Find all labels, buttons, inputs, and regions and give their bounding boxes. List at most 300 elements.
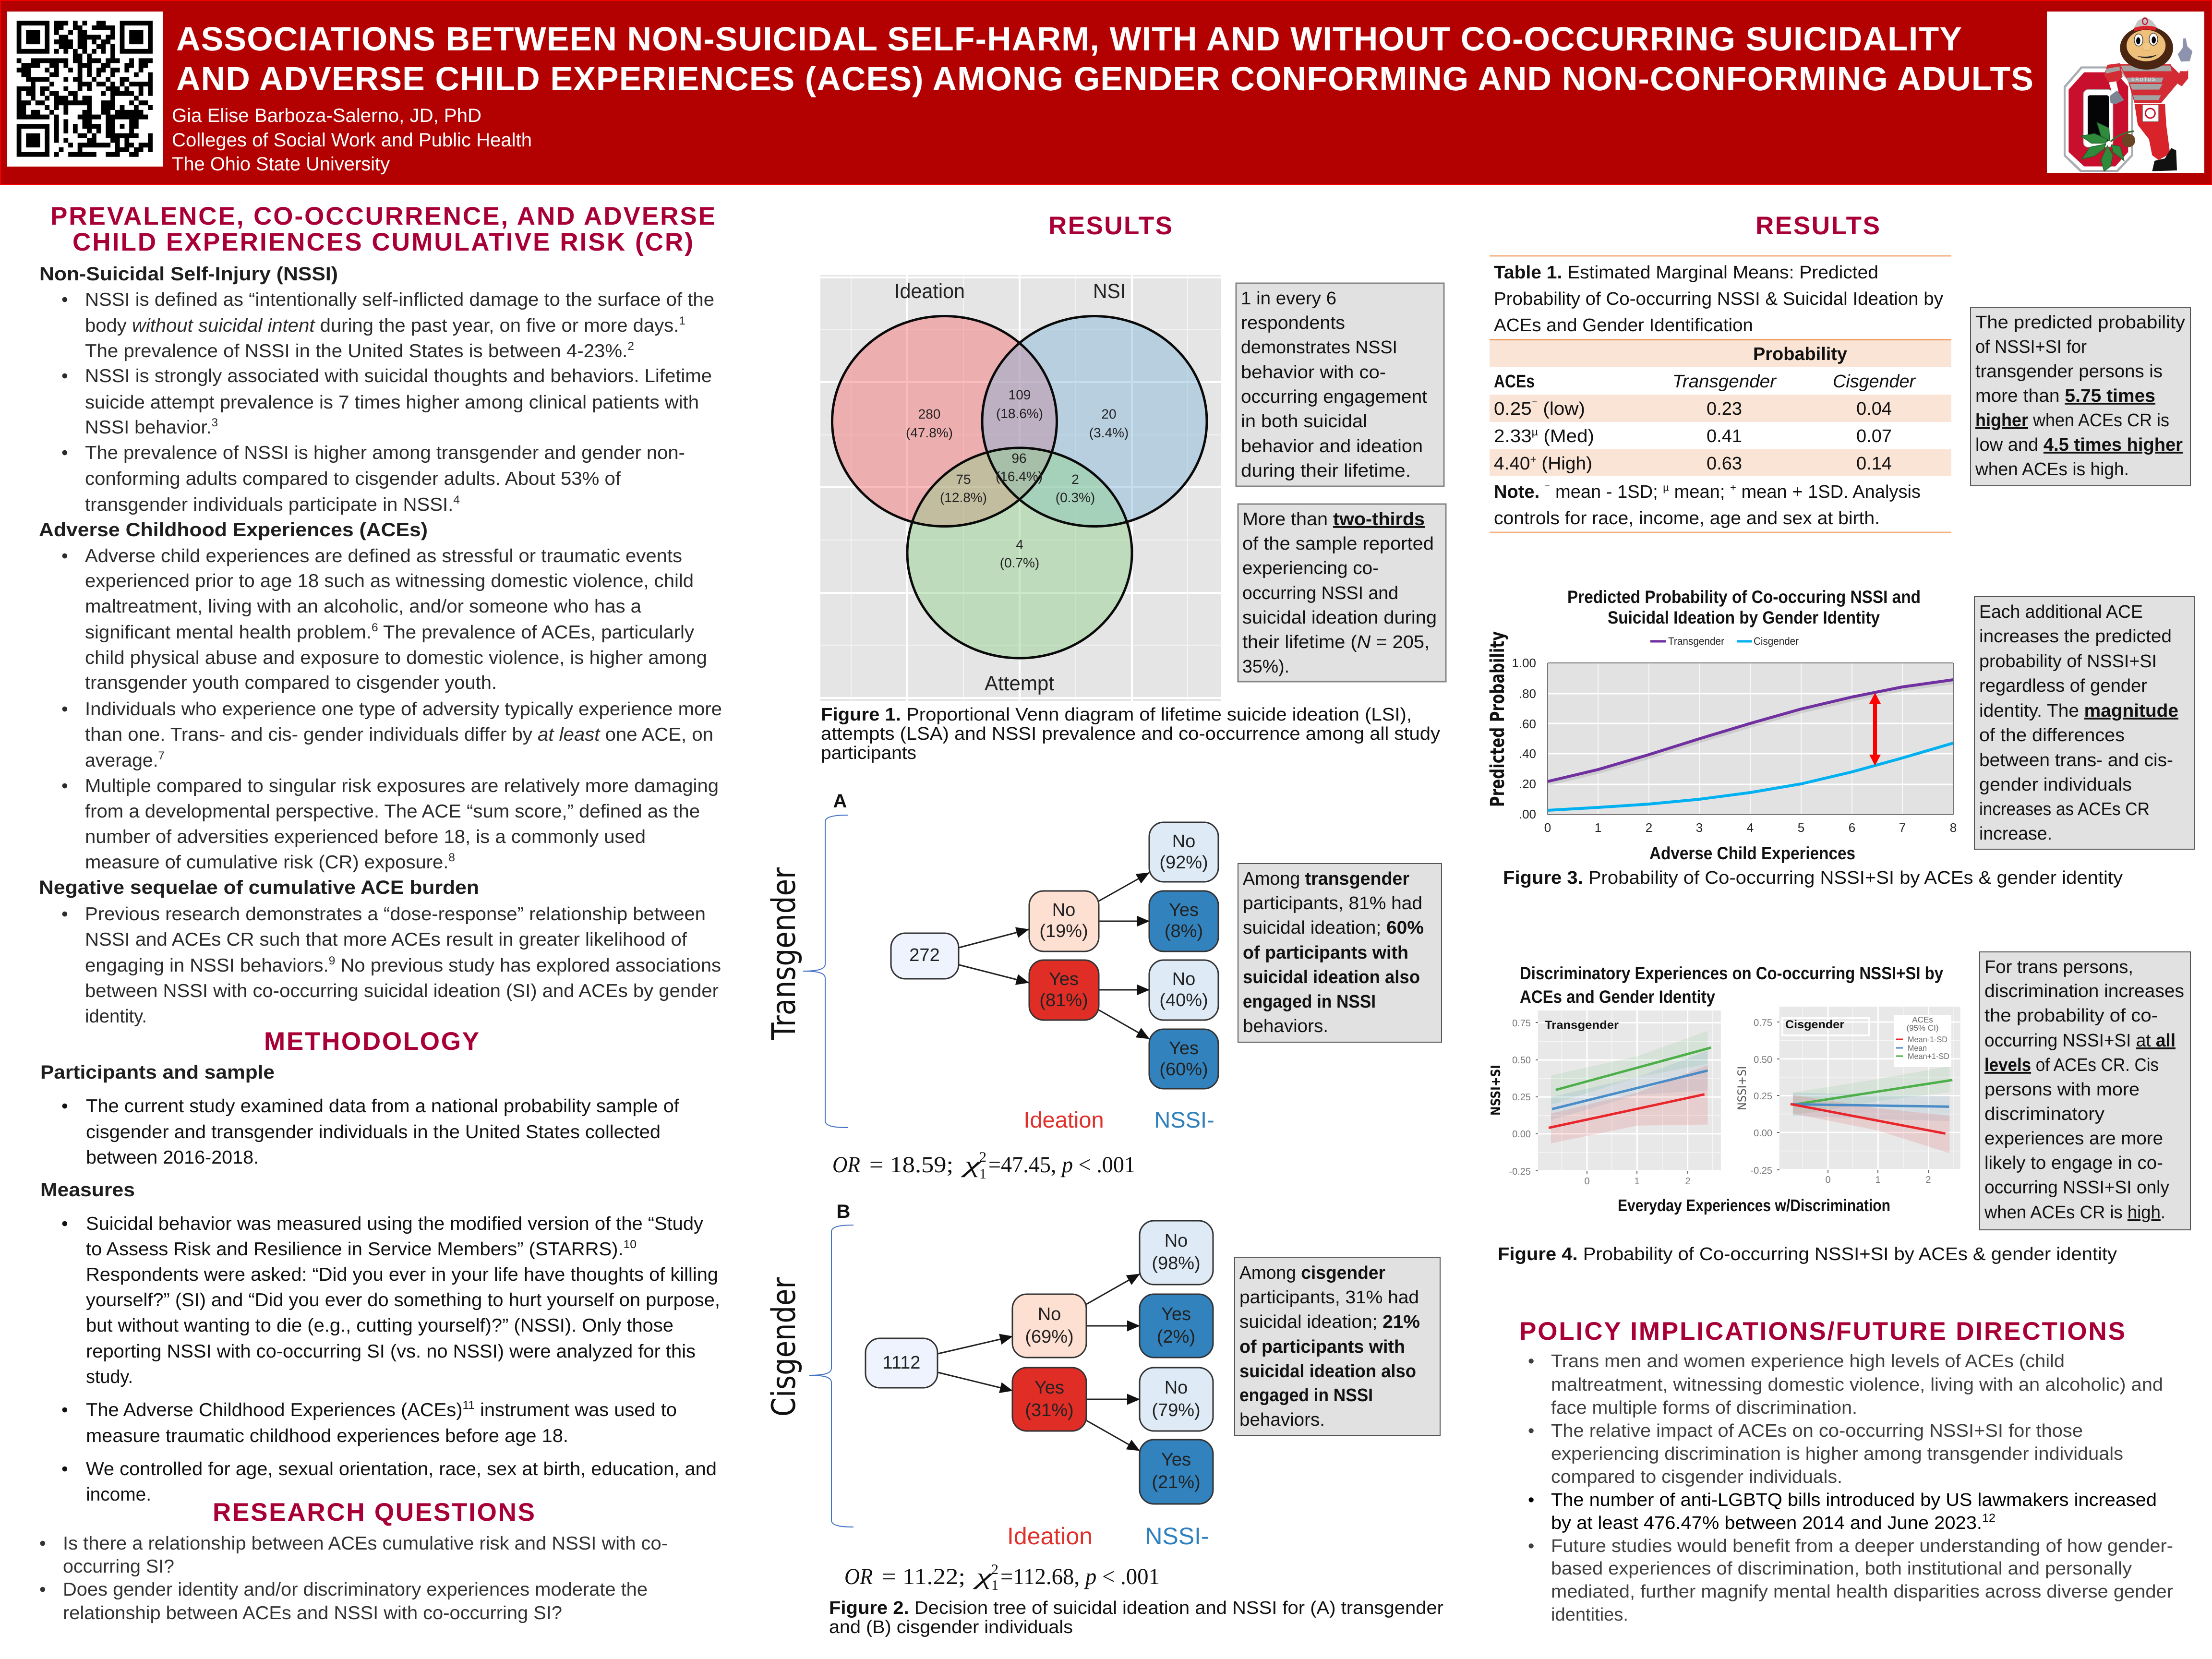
callout: trans persons discrimination: occurring NSSI+SI only	[1984, 1178, 2169, 1198]
legend	[1894, 1015, 1951, 1067]
chart: figure 3 predicted probability line chart: .40	[1519, 746, 1536, 761]
plot: transgender: -0.25	[1509, 1166, 1531, 1177]
callout: cisgender tree: engaged in NSSI	[1239, 1385, 1373, 1406]
statistic: cisgender odds ratio: 2	[991, 1562, 998, 1577]
callout: cisgender tree: of participants with	[1239, 1337, 1405, 1357]
callout: cisgender tree	[1235, 1257, 1440, 1435]
text block: questions: Does gender identity and/or discriminatory experiences moderate the	[63, 1579, 648, 1600]
text block: policy bullets: Trans men and women experience high levels of ACEs (child	[1551, 1351, 2065, 1371]
chart: decision tree A transgender: No	[1172, 969, 1195, 989]
plot: cisgender: 0.50	[1754, 1055, 1772, 1065]
table: estimated marginal means: µ	[1532, 426, 1539, 438]
icon: university mascot logo	[2047, 12, 2204, 173]
text block: questions	[39, 1533, 668, 1623]
callout: each additional ACE: identity. The magnitude	[1979, 701, 2178, 721]
chart: decision tree A transgender: Yes	[1049, 969, 1079, 989]
legend	[1650, 635, 1799, 647]
callout: each additional ACE: Each additional ACE	[1979, 602, 2143, 622]
panel: prevalence and cumulative risk	[39, 202, 722, 1027]
chart: decision tree A transgender: (8%)	[1165, 921, 1203, 941]
plot: cisgender	[1735, 1007, 1960, 1185]
text block: ACEs: •	[61, 776, 68, 796]
text block: negative sequelae: between NSSI with co-occurring suicidal ideation (SI) and ACEs by gender	[85, 981, 719, 1001]
chart: figure 4 discrimination panels	[1489, 963, 1960, 1215]
table: estimated marginal means: 0.23	[1707, 399, 1742, 419]
table: estimated marginal means: (Med)	[1538, 426, 1594, 446]
chart: decision tree A transgender: (19%)	[1039, 921, 1088, 941]
authors and affiliation: Gia Elise Barboza-Salerno, JD, PhD	[172, 105, 481, 126]
callout: transgender tree: suicidal ideation also	[1243, 967, 1420, 987]
header banner	[0, 0, 2212, 184]
callout: each additional ACE	[1974, 597, 2194, 849]
text block: ACEs: child physical abuse and exposure to domestic violence, is higher among	[85, 648, 707, 668]
plot: transgender	[1489, 1010, 1721, 1187]
callout: 1 in every 6: demonstrates NSSI	[1241, 337, 1397, 358]
plot: cisgender: 0.00	[1754, 1128, 1772, 1139]
chart: decision tree B cisgender: (31%)	[1025, 1400, 1074, 1420]
text block: policy bullets: identities.	[1551, 1605, 1628, 1625]
text block: policy bullets: face multiple forms of discrimination.	[1551, 1398, 1857, 1418]
chart title	[1567, 587, 1921, 627]
text block: NSSI: body without suicidal intent during the past year, on five or more days.	[85, 315, 670, 336]
table: estimated marginal means: µ	[1663, 481, 1669, 493]
chart: decision tree B cisgender: Yes	[1161, 1304, 1191, 1324]
chart: decision tree B cisgender	[765, 1201, 1213, 1550]
chart: proportional Venn diagram: NSI	[1093, 280, 1126, 303]
caption: figure 1	[821, 705, 1440, 763]
label: transgender: Transgender	[765, 867, 803, 1040]
text block: negative sequelae: identity.	[85, 1006, 147, 1027]
text block: negative sequelae: No previous study has explored associations	[335, 955, 721, 976]
table: estimated marginal means: mean + 1SD. Analysis	[1736, 482, 1921, 502]
text block: measures: measure traumatic childhood experiences before age 18.	[86, 1426, 568, 1446]
text block: participants: cisgender and transgender individuals in the United States collected	[86, 1122, 661, 1142]
chart: proportional Venn diagram: 75	[956, 472, 971, 487]
statistic: transgender odds ratio: 2	[979, 1149, 986, 1165]
chart: proportional Venn diagram: (12.8%)	[940, 490, 987, 505]
poster title: ASSOCIATIONS BETWEEN NON-SUICIDAL SELF-HARM, WITH AND WITHOUT CO-OCCURRING SUICIDALITY	[176, 20, 1962, 58]
statistic: transgender odds ratio: =47.45, p < .001	[988, 1152, 1135, 1178]
chart title: Predicted Probability of Co-occuring NSSI and	[1567, 587, 1921, 607]
table: estimated marginal means: controls for race, income, age and sex at birth.	[1494, 508, 1880, 529]
text block: questions: •	[39, 1579, 46, 1600]
text block: policy bullets: •	[1528, 1490, 1534, 1510]
plot: transgender: 0.75	[1512, 1018, 1531, 1029]
callout: trans persons discrimination: discrimination increases	[1984, 981, 2184, 1001]
plot: transgender: 0	[1584, 1176, 1590, 1187]
statistic: transgender odds ratio: χ	[961, 1152, 982, 1178]
callout: trans persons discrimination: For trans persons,	[1984, 957, 2133, 977]
plot: transgender: 0.00	[1512, 1129, 1531, 1140]
chart: proportional Venn diagram: 280	[918, 407, 940, 421]
caption: figure 2: and (B) cisgender individuals	[829, 1617, 1073, 1637]
plot: cisgender: Cisgender	[1785, 1018, 1844, 1031]
text block: policy bullets: based experiences of discrimination, both institutional and personally	[1551, 1559, 2132, 1579]
statistic: transgender odds ratio: OR	[832, 1152, 860, 1178]
callout: transgender tree	[1238, 864, 1442, 1042]
callout: cisgender tree: Among cisgender	[1239, 1263, 1385, 1283]
callout: 1 in every 6: during their lifetime.	[1241, 461, 1411, 481]
callout: cisgender tree: behaviors.	[1239, 1410, 1325, 1430]
callout: trans persons discrimination: persons with more	[1984, 1080, 2140, 1100]
chart: proportional Venn diagram	[820, 275, 1221, 701]
text block: measures: We controlled for age, sexual orientation, race, sex at birth, education, and	[86, 1459, 717, 1479]
callout: each additional ACE: increase.	[1979, 824, 2052, 844]
callout: predicted probability: more than 5.75 times	[1975, 386, 2155, 406]
callout: predicted probability: when ACEs is high.	[1975, 459, 2129, 480]
text block: ACEs: from a developmental perspective. The ACE “sum score,” defined as the	[85, 801, 700, 822]
table: estimated marginal means: 0.04	[1856, 399, 1892, 419]
chart: decision tree A transgender	[765, 791, 1218, 1132]
chart: figure 3 predicted probability line chart	[1487, 587, 1957, 863]
caption: figure 4: Figure 4. Probability of Co-occurring NSSI+SI by ACEs & gender identity	[1498, 1244, 2117, 1264]
chart: decision tree A transgender: (60%)	[1159, 1059, 1208, 1080]
plot: cisgender: 0.75	[1754, 1018, 1772, 1028]
chart: figure 3 predicted probability line chart: 3	[1696, 820, 1703, 835]
text block: measures: The Adverse Childhood Experiences (ACEs)	[86, 1400, 454, 1420]
text block: NSSI: •	[61, 366, 68, 386]
table: estimated marginal means: 0.41	[1707, 426, 1742, 446]
text block: measures: reporting NSSI with co-occurring SI (vs. no NSSI) were analyzed for this	[86, 1341, 696, 1362]
text block: NSSI: •	[61, 289, 68, 310]
text block: NSSI: suicide attempt prevalence is 7 times higher among clinical patients with	[85, 392, 699, 413]
text block: measures: Suicidal behavior was measured using the modified version of the “Study	[86, 1214, 704, 1234]
text block: negative sequelae: NSSI and ACEs CR such that more ACEs result in greater likelihood of	[85, 929, 687, 950]
chart: decision tree A transgender: 272	[909, 945, 940, 965]
text block: ACEs: •	[61, 546, 68, 566]
text block: ACEs: number of adversities experienced before 18, is a commonly used	[85, 827, 646, 847]
callout: two-thirds	[1238, 504, 1446, 682]
text block: participants: Participants and sample	[40, 1062, 275, 1083]
heading: prevalence: PREVALENCE, CO-OCCURRENCE, AND ADVERSE	[50, 202, 715, 230]
caption: figure 3: Figure 3. Probability of Co-occurring NSSI+SI by ACEs & gender identity	[1503, 868, 2123, 888]
legend: Mean+1-SD	[1908, 1052, 1949, 1061]
text block: ACEs: 6	[372, 621, 378, 634]
chart: proportional Venn diagram: (0.7%)	[1000, 555, 1039, 570]
chart: decision tree B cisgender: B	[837, 1201, 850, 1222]
chart: figure 3 predicted probability line chart: 1	[1595, 820, 1601, 835]
table: estimated marginal means: 2.33	[1494, 426, 1529, 446]
text block: ACEs: experienced prior to age 18 such as witnessing domestic violence, child	[85, 571, 694, 591]
text block: questions: occurring SI?	[63, 1556, 174, 1577]
authors and affiliation: Colleges of Social Work and Public Health	[172, 130, 532, 151]
chart: figure 3 predicted probability line chart: Predicted Probability	[1487, 631, 1509, 807]
text block: NSSI: •	[61, 443, 68, 463]
chart: proportional Venn diagram: Ideation	[894, 280, 965, 303]
chart: decision tree B cisgender: (69%)	[1025, 1327, 1074, 1347]
text block: policy bullets	[1528, 1351, 2173, 1625]
statistic: transgender odds ratio	[832, 1149, 1135, 1182]
text block: NSSI: 1	[679, 314, 685, 327]
chart: decision tree A transgender: (40%)	[1159, 990, 1208, 1010]
chart: decision tree A transgender: No	[1172, 831, 1195, 852]
table: estimated marginal means: Table 1. Estimated Marginal Means: Predicted	[1494, 263, 1878, 283]
heading: results middle column: RESULTS	[1048, 212, 1172, 240]
text block: policy bullets: mediated, further magnify mental health disparities across diverse gender	[1551, 1582, 2173, 1602]
callout: trans persons discrimination: discriminatory	[1984, 1104, 2104, 1124]
statistic: cisgender odds ratio	[844, 1562, 1160, 1593]
text block: ACEs: average.	[85, 750, 158, 771]
text block: NSSI	[39, 264, 714, 515]
caption: figure 2	[829, 1598, 1443, 1637]
chart: figure 3 predicted probability line chart: 0	[1544, 820, 1551, 835]
chart: figure 3 predicted probability line chart: 2	[1646, 820, 1652, 835]
chart: figure 3 predicted probability line chart: Adverse Child Experiences	[1649, 843, 1855, 863]
text block: NSSI: 4	[453, 493, 460, 506]
callout: predicted probability	[1971, 307, 2190, 486]
text block: measures: •	[61, 1459, 68, 1479]
callout: two-thirds: 35%).	[1242, 657, 1289, 677]
panel: policy implications	[1519, 1317, 2173, 1625]
table: estimated marginal means: mean - 1SD;	[1550, 482, 1663, 502]
table: estimated marginal means: ACEs and Gender Identification	[1494, 315, 1753, 336]
table: estimated marginal means: 0.25	[1494, 399, 1529, 419]
text block: measures: instrument was used to	[475, 1400, 677, 1420]
plot: cisgender: 0	[1825, 1175, 1831, 1185]
table: estimated marginal means: Probability of Co-occurring NSSI & Suicidal Ideation by	[1494, 289, 1943, 309]
text block: ACEs: The prevalence of ACEs, particularly	[378, 622, 695, 643]
text block: measures: Measures	[40, 1179, 135, 1201]
heading: prevalence	[50, 202, 715, 256]
caption: figure 1: attempts (LSA) and NSSI prevalence and co-occurrence among all study	[821, 724, 1440, 744]
chart: decision tree A transgender: Ideation	[1023, 1107, 1104, 1132]
legend: Mean	[1908, 1044, 1927, 1053]
text block: measures: yourself?” (SI) and “Did you ever do something to hurt yourself on purpose,	[86, 1290, 720, 1310]
chart: decision tree B cisgender: No	[1038, 1304, 1061, 1324]
statistic: cisgender odds ratio: OR	[844, 1564, 873, 1589]
callout: each additional ACE: increases as ACEs CR	[1979, 799, 2150, 819]
text block: ACEs: than one. Trans- and cis- gender individuals differ by at least one ACE, on	[85, 724, 713, 745]
callout: transgender tree: engaged in NSSI	[1243, 992, 1376, 1012]
callout: transgender tree: suicidal ideation; 60%	[1243, 918, 1424, 938]
QR code	[7, 12, 163, 167]
chart: figure 3 predicted probability line chart: .80	[1519, 686, 1536, 701]
plot: transgender: NSSI+SI	[1489, 1065, 1503, 1116]
text block: participants: The current study examined data from a national probability sample of	[86, 1096, 679, 1117]
brace	[803, 815, 848, 1128]
text block: questions: •	[39, 1533, 46, 1554]
text block: participants: between 2016-2018.	[86, 1147, 259, 1168]
authors and affiliation	[172, 105, 532, 175]
legend: Transgender	[1668, 635, 1724, 647]
text block: measures: study.	[86, 1367, 133, 1387]
text block: negative sequelae: Previous research demonstrates a “dose-response” relationship between	[85, 904, 706, 925]
chart: decision tree A transgender: A	[833, 791, 847, 812]
text block: measures: to Assess Risk and Resilience in Service Members” (STARRS).	[86, 1239, 610, 1260]
plot: transgender: 0.25	[1512, 1092, 1531, 1103]
chart: decision tree B cisgender: (2%)	[1157, 1327, 1195, 1347]
text block: negative sequelae: 9	[329, 954, 335, 967]
chart: decision tree B cisgender: 1112	[883, 1353, 920, 1373]
callout: two-thirds: occurring NSSI and	[1242, 583, 1398, 603]
chart: figure 3 predicted probability line chart: .20	[1519, 777, 1536, 791]
statistic: cisgender odds ratio: χ	[973, 1564, 994, 1589]
plot: cisgender: 0.25	[1754, 1091, 1772, 1102]
callout: two-thirds: More than two-thirds	[1242, 509, 1425, 529]
text block: NSSI: 2	[627, 340, 634, 353]
chart: proportional Venn diagram: 4	[1016, 537, 1023, 552]
text block: policy bullets: •	[1528, 1351, 1534, 1371]
callout: transgender tree: Among transgender	[1243, 869, 1409, 889]
table: estimated marginal means: ACEs	[1494, 372, 1535, 392]
callout: each additional ACE: probability of NSSI+SI	[1979, 651, 2157, 672]
text block: NSSI: The prevalence of NSSI in the United States is between 4-23%.	[85, 341, 612, 361]
text block: measures: •	[61, 1400, 68, 1420]
text block: questions: Is there a relationship between ACEs cumulative risk and NSSI with co-	[63, 1533, 668, 1554]
table: estimated marginal means: 0.63	[1707, 454, 1742, 474]
callout: transgender tree: participants, 81% had	[1243, 893, 1422, 914]
text block: measures: but without wanting to die (e.g., cutting yourself)?” (NSSI). Only those	[86, 1315, 673, 1336]
chart: figure 3 predicted probability line chart: 6	[1849, 820, 1855, 835]
text block: ACEs: •	[61, 699, 68, 720]
caption: figure 1: participants	[821, 743, 916, 763]
text block: ACEs: Adverse Childhood Experiences (ACEs)	[39, 519, 428, 541]
chart: figure 3 predicted probability line chart: 8	[1950, 820, 1957, 835]
chart: proportional Venn diagram: 2	[1071, 472, 1079, 487]
callout: predicted probability: transgender persons is	[1975, 361, 2163, 382]
brace	[809, 1225, 854, 1527]
callout: trans persons discrimination: experiences are more	[1984, 1129, 2163, 1149]
text block: negative sequelae: •	[61, 904, 68, 925]
chart title: Discriminatory Experiences on Co-occurring NSSI+SI by	[1520, 963, 1943, 983]
callout: each additional ACE: between trans- and cis-	[1979, 750, 2173, 770]
chart: proportional Venn diagram: (0.3%)	[1056, 490, 1095, 505]
callout: two-thirds: experiencing co-	[1242, 558, 1379, 578]
callout: predicted probability: of NSSI+SI for	[1975, 337, 2087, 357]
icon: university mascot logo: BRUTUS	[2131, 77, 2156, 82]
text block: measures: 11	[462, 1399, 475, 1412]
panel: methodology	[40, 1027, 720, 1505]
chart: proportional Venn diagram: (16.4%)	[996, 469, 1043, 484]
text block: NSSI: conforming adults compared to cisgender adults. About 53% of	[85, 469, 621, 489]
table: estimated marginal means	[1490, 256, 1951, 532]
callout: each additional ACE: increases the predicted	[1979, 626, 2172, 647]
callout: predicted probability: higher when ACEs CR is	[1975, 410, 2169, 431]
plot: transgender: 0.50	[1512, 1055, 1531, 1066]
caption: figure 1: Figure 1. Proportional Venn diagram of lifetime suicide ideation (LSI),	[821, 705, 1412, 725]
heading: methodology: METHODOLOGY	[264, 1027, 479, 1056]
table: estimated marginal means: 4.40	[1494, 454, 1529, 474]
text block: ACEs: Adverse child experiences are defined as stressful or traumatic events	[85, 546, 682, 566]
table: estimated marginal means: ⁻	[1532, 397, 1538, 409]
text block: negative sequelae: engaging in NSSI behaviors.	[85, 955, 322, 976]
table: estimated marginal means: +	[1530, 453, 1537, 465]
text block: ACEs: significant mental health problem.	[85, 622, 364, 643]
statistic: cisgender odds ratio: 1	[991, 1577, 998, 1593]
callout: trans persons discrimination: levels of ACEs CR. Cis	[1984, 1055, 2159, 1075]
table: estimated marginal means: mean;	[1669, 482, 1730, 502]
legend: Cisgender	[1754, 635, 1799, 647]
callout: cisgender tree: participants, 31% had	[1239, 1287, 1419, 1308]
plot: cisgender: -0.25	[1750, 1166, 1772, 1176]
callout: cisgender tree: suicidal ideation; 21%	[1239, 1312, 1420, 1332]
table: estimated marginal means: ⁻	[1545, 481, 1550, 493]
plot: cisgender: NSSI+SI	[1735, 1066, 1749, 1110]
callout: each additional ACE: gender individuals	[1979, 775, 2132, 795]
text block: policy bullets: maltreatment, witnessing domestic violence, living with an alcoholic) and	[1551, 1375, 2163, 1395]
table: estimated marginal means: (High)	[1537, 454, 1592, 474]
table: estimated marginal means: Probability	[1753, 344, 1847, 364]
chart: decision tree B cisgender: NSSI-	[1145, 1523, 1209, 1550]
chart: decision tree B cisgender: No	[1165, 1231, 1188, 1251]
text block: measures: •	[61, 1214, 68, 1234]
callout: 1 in every 6: occurring engagement	[1241, 387, 1427, 407]
text block: policy bullets: The relative impact of ACEs on co-occurring NSSI+SI for those	[1551, 1421, 2083, 1441]
text block: NSSI: The prevalence of NSSI is higher among transgender and gender non-	[85, 443, 685, 463]
legend: Mean-1-SD	[1908, 1035, 1948, 1044]
callout: trans persons discrimination: when ACEs CR is high.	[1984, 1202, 2165, 1223]
poster title	[176, 20, 2033, 97]
chart title: ACEs and Gender Identity	[1520, 987, 1715, 1007]
callout: 1 in every 6: respondents	[1241, 313, 1345, 333]
table: estimated marginal means: Transgender	[1672, 372, 1777, 392]
chart title: Suicidal Ideation by Gender Identity	[1608, 608, 1880, 627]
text block: measures: 10	[624, 1238, 637, 1251]
text block: ACEs: 8	[448, 851, 455, 864]
table: estimated marginal means: 0.14	[1856, 454, 1892, 474]
chart: proportional Venn diagram: (18.6%)	[996, 406, 1043, 421]
text block: NSSI: Non-Suicidal Self-Injury (NSSI)	[39, 264, 338, 285]
statistic: transgender odds ratio: = 18.59;	[869, 1152, 953, 1178]
text block: ACEs	[39, 519, 722, 873]
plot: cisgender: 1	[1875, 1175, 1881, 1185]
table: estimated marginal means: 0.07	[1856, 426, 1892, 446]
text block: NSSI: NSSI is strongly associated with suicidal thoughts and behaviors. Lifetime	[85, 366, 712, 386]
text block: policy bullets: •	[1528, 1421, 1534, 1441]
statistic: transgender odds ratio: 1	[979, 1166, 986, 1182]
statistic: cisgender odds ratio: = 11.22;	[882, 1564, 965, 1589]
chart: figure 3 predicted probability line chart: .00	[1519, 807, 1536, 821]
text block: policy bullets: The number of anti-LGBTQ bills introduced by US lawmakers increased	[1551, 1490, 2157, 1510]
plot: cisgender: 2	[1925, 1175, 1931, 1185]
chart: figure 3 predicted probability line chart: 4	[1747, 820, 1754, 835]
text block: measures	[40, 1179, 720, 1505]
text block: negative sequelae	[39, 877, 721, 1027]
chart: decision tree A transgender: No	[1052, 900, 1075, 920]
heading: results right column: RESULTS	[1755, 212, 1880, 240]
callout: two-thirds: of the sample reported	[1242, 534, 1434, 554]
chart: proportional Venn diagram: (47.8%)	[906, 425, 953, 440]
text block: NSSI: NSSI is defined as “intentionally self-inflicted damage to the surface of the	[85, 289, 714, 310]
callout: trans persons discrimination: likely to engage in co-	[1984, 1153, 2163, 1173]
callout: 1 in every 6	[1236, 283, 1444, 486]
callout: each additional ACE: of the differences	[1979, 725, 2125, 745]
poster title: AND ADVERSE CHILD EXPERIENCES (ACES) AMONG GENDER CONFORMING AND NON-CONFORMING ADULTS	[176, 60, 2033, 97]
table: estimated marginal means: +	[1730, 481, 1736, 493]
callout: two-thirds: suicidal ideation during	[1242, 608, 1437, 628]
callout: predicted probability: low and 4.5 times higher	[1975, 435, 2183, 455]
heading: policy implications: POLICY IMPLICATIONS/FUTURE DIRECTIONS	[1519, 1317, 2125, 1346]
arrow: gap between groups	[1869, 693, 1881, 766]
chart: figure 3 predicted probability line chart: 5	[1798, 820, 1804, 835]
text block: ACEs: maltreatment, living with an alcoholic, and/or someone who has a	[85, 596, 641, 617]
text block: participants: •	[61, 1096, 68, 1117]
text block: negative sequelae: Negative sequelae of cumulative ACE burden	[39, 877, 479, 898]
chart: decision tree B cisgender: (98%)	[1152, 1253, 1201, 1274]
chart: proportional Venn diagram: (3.4%)	[1089, 425, 1129, 440]
text block: ACEs: Multiple compared to singular risk exposures are relatively more damaging	[85, 776, 719, 796]
callout: each additional ACE: regardless of gender	[1979, 676, 2147, 696]
chart: decision tree B cisgender: (21%)	[1152, 1472, 1201, 1492]
label: cisgender: Cisgender	[765, 1277, 803, 1417]
callout: 1 in every 6: in both suicidal	[1241, 411, 1367, 432]
heading: prevalence: CHILD EXPERIENCES CUMULATIVE RISK (CR)	[72, 228, 693, 256]
callout: two-thirds: their lifetime ( N = 205,	[1242, 632, 1430, 652]
chart: decision tree A transgender: Yes	[1169, 900, 1199, 920]
text block: policy bullets: compared to cisgender individuals.	[1551, 1467, 1842, 1487]
plot: transgender: 1	[1634, 1176, 1640, 1187]
text block: NSSI: NSSI behavior.	[85, 417, 210, 438]
